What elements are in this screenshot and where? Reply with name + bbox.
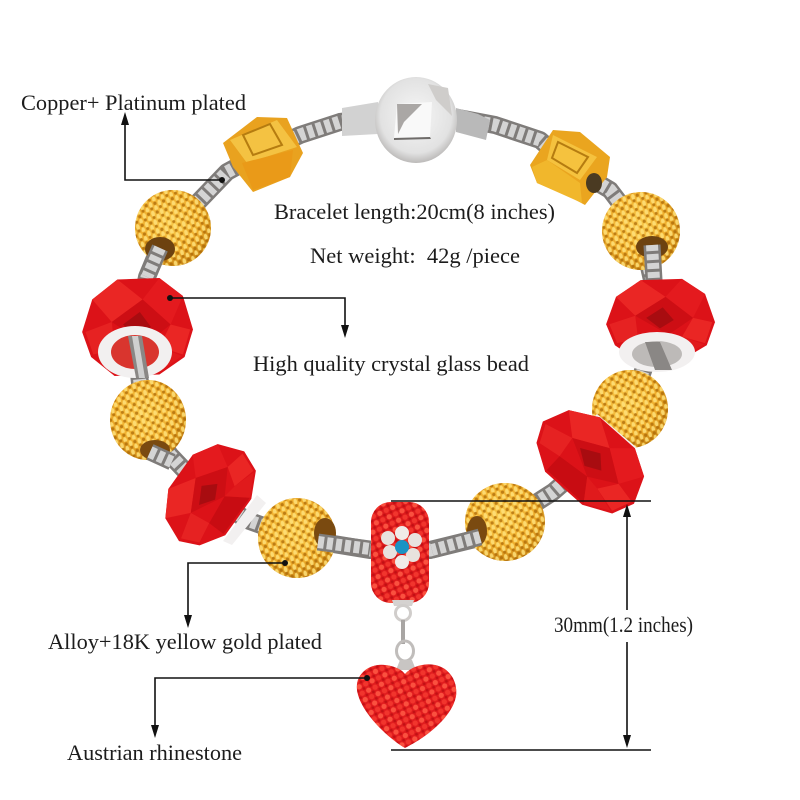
label: alloy gold plated <box>48 560 322 654</box>
label: bracelet length: Bracelet length:20cm(8 inches) <box>274 199 555 224</box>
gold bead 1 <box>135 190 211 266</box>
gold bead 3 <box>110 380 186 460</box>
gold bead 4 <box>592 370 668 448</box>
label: crystal glass bead <box>167 295 529 376</box>
red crystal glass beads <box>82 278 715 561</box>
clasp <box>342 77 490 163</box>
label: net weight: Net weight: 42g /piece <box>310 243 520 268</box>
chain stubs leaving bead holes <box>147 245 654 550</box>
charm bead with flower <box>371 502 429 603</box>
bracelet chain <box>137 118 660 550</box>
label: copper platinum plated: Copper+ Platinum plated <box>21 90 246 115</box>
dimension: charm height: 30mm(1.2 inches) <box>554 612 693 637</box>
square gold bead left <box>223 117 303 192</box>
gold bead 5 <box>258 498 336 578</box>
red bead upper left <box>82 278 193 378</box>
label: alloy gold plated: Alloy+18K yellow gold plated <box>48 629 322 654</box>
gold bead 6 <box>465 483 545 561</box>
dimension: charm height <box>391 501 693 750</box>
red bead upper right <box>606 279 715 372</box>
gold beads <box>110 190 680 578</box>
red bead lower right <box>519 390 662 531</box>
charm link <box>392 600 416 670</box>
red bead lower left <box>146 428 272 561</box>
square gold bead right <box>530 130 610 205</box>
label: copper platinum plated <box>21 90 246 183</box>
label: crystal glass bead: High quality crystal glass bead <box>253 351 529 376</box>
gold bead 2 <box>602 192 680 270</box>
label: austrian rhinestone <box>67 675 370 765</box>
label: austrian rhinestone: Austrian rhinestone <box>67 740 242 765</box>
heart charm <box>357 664 456 748</box>
